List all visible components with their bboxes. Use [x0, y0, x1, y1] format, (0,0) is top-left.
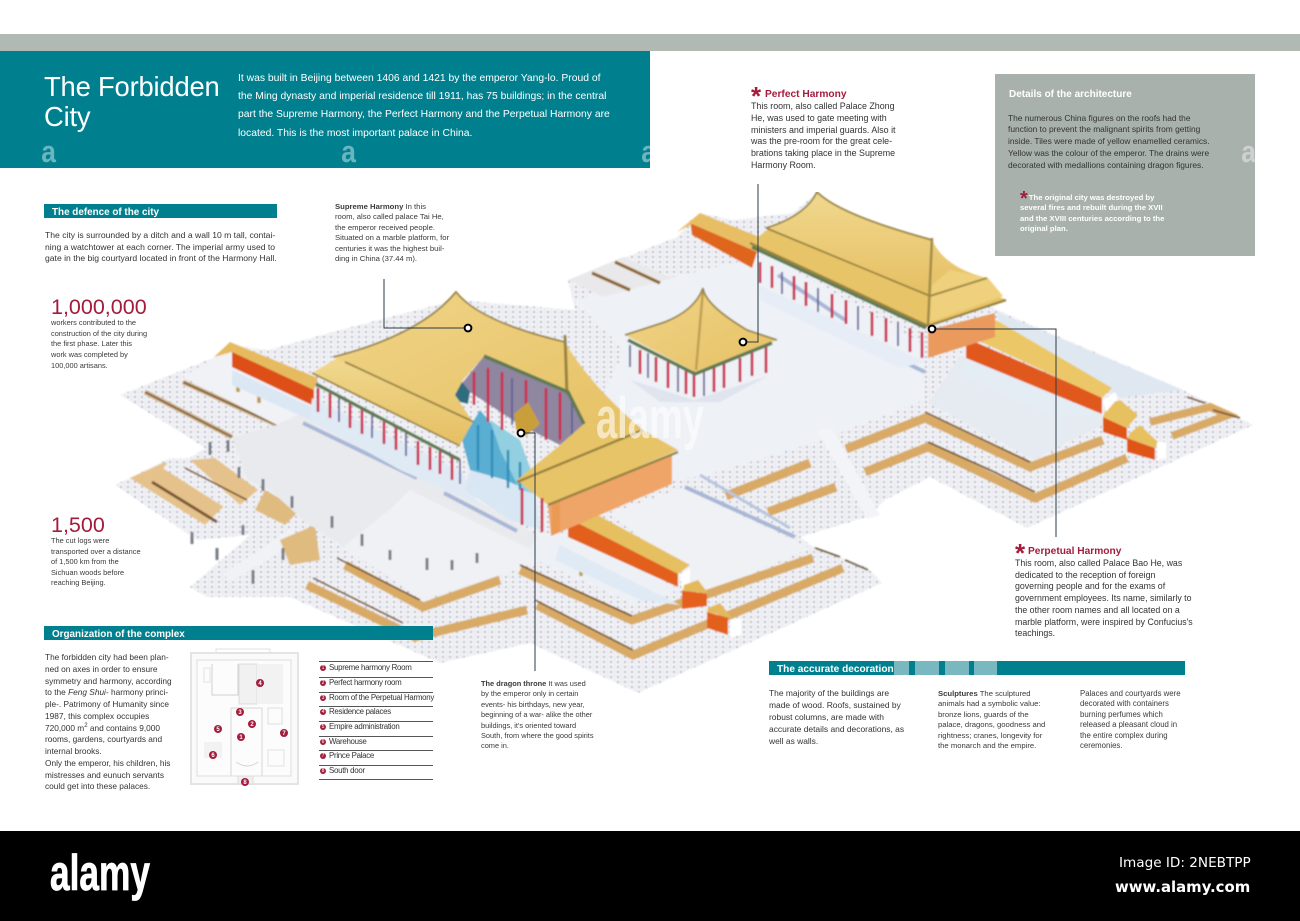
decoration text: wood: robust columns, are made with [769, 712, 884, 722]
organization text: ned on axes in order to ensure [45, 664, 158, 674]
stat: 1,000,000: 1,000,000 [51, 295, 147, 319]
map legend: 3 [322, 694, 324, 700]
terrace: right tan bands [726, 397, 1240, 519]
floor plan map: 4 [258, 681, 262, 687]
organization text: 1987, this complex occupies [45, 711, 149, 721]
footer url: www.alamy.com [1115, 878, 1250, 896]
organization text: mistresses and eunuch servants [45, 770, 164, 780]
plaza: central [232, 405, 545, 600]
callout: Perpetual Harmony: governing people and for the exams of [1015, 581, 1165, 591]
map legend: 4 [322, 709, 324, 715]
map legend [319, 661, 434, 780]
map legend: 2 [322, 680, 324, 686]
floor plan map: 2 [250, 722, 254, 728]
panel heading: Details of the architecture [1009, 89, 1132, 100]
callout: Perpetual Harmony: * [1015, 538, 1025, 568]
top grey band [0, 34, 1300, 51]
decoration text: sculptures: palace, dragons, goodness and [938, 720, 1045, 729]
wall: rear right orange [960, 320, 1166, 460]
callout line: Perfect Harmony [740, 184, 758, 345]
footer image id: Image ID: 2NEBTPP [1119, 855, 1251, 871]
section: defence heading [44, 204, 277, 218]
panel note: and the XVIII centuries according to the [1020, 214, 1164, 223]
callout: dragon throne: by the emperor only in certain [481, 689, 578, 698]
intro text: the Ming dynasty and imperial residence till 1911, has 75 buildings; in the central [238, 91, 606, 102]
organization text: to the Feng Shui- harmony princi- [45, 687, 168, 697]
building: Supreme Harmony hall [310, 292, 678, 536]
panel text [1008, 112, 1210, 170]
stat: 1,000,000 [51, 295, 147, 370]
decoration text: wood: made of wood. Roofs, sustained by [769, 700, 901, 710]
callout: Perpetual Harmony: the other room names and all located on a [1015, 605, 1180, 615]
organization text: 720,000 m2 and contains 9,000 [45, 722, 160, 732]
organization text: Only the emperor, his children, his [45, 758, 170, 768]
callout: Perfect Harmony: brations taking place in the Supreme [751, 148, 895, 158]
callout: Perpetual Harmony [1015, 538, 1193, 638]
map legend: Warehouse [329, 736, 367, 746]
decoration text: perfumes: ceremonies. [1080, 741, 1122, 750]
floor plan map: 7 [282, 731, 286, 737]
callout: Perpetual Harmony: marble platform, were inspired by Confucius's [1015, 617, 1193, 627]
stat: 1,500: reaching Beijing. [51, 578, 106, 587]
organization text [45, 652, 172, 791]
watermark letters: a [41, 134, 56, 168]
callout: dragon throne [481, 679, 594, 750]
organization text: The forbidden city had been plan- [45, 652, 169, 662]
map legend: 1 [322, 665, 324, 671]
callout: Perfect Harmony: This room, also called Palace Zhong [751, 101, 895, 111]
callout line: Supreme Harmony [384, 279, 471, 331]
organization text: ple-. Patrimony of Humanity since [45, 699, 169, 709]
organization text: could get into these palaces. [45, 781, 150, 791]
map legend: Perfect harmony room [329, 678, 401, 687]
callout: Supreme Harmony: Supreme Harmony In this [335, 202, 426, 211]
callout: dragon throne: The dragon throne It was used [481, 679, 586, 688]
organization text: internal brooks. [45, 746, 102, 756]
floor plan map [190, 648, 299, 786]
stat: 1,500: The cut logs were [51, 536, 109, 545]
panel note: several fires and rebuilt during the XVII [1020, 203, 1163, 212]
decoration text: sculptures: animals had a symbolic value: [938, 699, 1041, 708]
callout: Perpetual Harmony: dedicated to the reception of foreign [1015, 570, 1155, 580]
columns: left side [318, 388, 460, 484]
map legend: Supreme harmony Room [329, 663, 412, 672]
callout: Perpetual Harmony: teachings. [1015, 628, 1055, 638]
callout: Perfect Harmony: ministers and imperial guards. Also it [751, 125, 896, 135]
building: Perfect Harmony pavilion [625, 288, 777, 402]
plaza: upper left [183, 350, 318, 425]
callout: dragon throne: South, from where the good spirits [481, 731, 594, 740]
section: organization heading [44, 626, 433, 640]
callout: Perfect Harmony: Perfect Harmony [765, 89, 847, 100]
stat: 1,000,000: work was completed by [51, 350, 128, 359]
decoration text: sculptures: bronze lions, guards of the [938, 710, 1029, 719]
callout: Perfect Harmony: was the pre-room for the great cele- [751, 136, 892, 146]
panel text: Yellow was the colour of the emperor. The drains were [1008, 148, 1209, 158]
stat: 1,000,000: workers contributed to the [51, 318, 136, 327]
callout: Perfect Harmony: * [751, 81, 761, 111]
title: City [44, 101, 90, 132]
defence text: gate in the big courtyard located in front of the Harmony Hall. [45, 253, 277, 263]
decoration text: perfumes: released a pleasant cloud in [1080, 720, 1177, 729]
map legend: 6 [322, 738, 324, 744]
intro text: part the Supreme Harmony, the Perfect Harmony and the Perpetual Harmony are [238, 109, 610, 120]
decoration text: wood: accurate details and decorations, as [769, 724, 904, 734]
intro text: located. This is the most important palace in China. [238, 128, 472, 139]
callout: Supreme Harmony: centuries it was the highest buil- [335, 244, 444, 253]
floor plan map: 3 [238, 710, 242, 716]
map legend: Empire administration [329, 722, 399, 731]
map legend: Residence palaces [329, 707, 391, 716]
map legend: 7 [322, 753, 324, 759]
stat: 1,500: transported over a distance [51, 546, 141, 556]
decoration text: sculptures: the monarch and the empire. [938, 741, 1036, 750]
map legend: 8 [322, 768, 324, 774]
callout: Perfect Harmony [751, 81, 896, 170]
watermark letters: a [341, 134, 356, 168]
wall: rear left orange [677, 213, 767, 268]
intro text: It was built in Beijing between 1406 and 1421 by the emperor Yang-lo. Proud of [238, 73, 600, 84]
decoration text: perfumes: decorated with containers [1080, 699, 1169, 708]
stat: 1,000,000: the first phase. Later this [51, 339, 132, 348]
decoration text: perfumes: the entire complex during [1080, 731, 1168, 740]
callout: Perpetual Harmony: government employees. Its name, similarly to [1015, 593, 1192, 603]
callout: Supreme Harmony [335, 202, 449, 263]
terrace: left lower stairs [130, 458, 258, 525]
callout: dragon throne: beginning of a war- alike the other [481, 710, 592, 719]
panel note: *The original city was destroyed by [1020, 188, 1154, 210]
wall: lower front orange [555, 507, 741, 638]
columns: interior [474, 368, 572, 440]
wall: left orange [214, 342, 330, 420]
panel text: The numerous China figures on the roofs had the [1008, 112, 1190, 122]
map legend: Room of the Perpetual Harmony [329, 692, 434, 702]
callout: dragon throne: events- his birthdays, new year, [481, 700, 585, 709]
panel: details of the architecture [995, 74, 1255, 256]
callout line: dragon throne [518, 430, 535, 671]
platform silhouette with balustrades [115, 193, 1253, 693]
watermark: alamy: alamy [596, 386, 704, 451]
stat: 1,500: 1,500 [51, 513, 105, 537]
floor plan map: 6 [211, 753, 215, 759]
plaza: front of lower wall [525, 535, 680, 603]
map legend: Prince Palace [329, 751, 374, 760]
callout: dragon throne: buildings, it's oriented toward [481, 721, 576, 730]
decoration text: perfumes: burning perfumes which [1080, 710, 1163, 719]
organization text: rooms, gardens, courtyards and [45, 734, 162, 744]
decoration text: perfumes: Palaces and courtyards were [1080, 689, 1181, 698]
plaza: behind right wall [997, 312, 1183, 398]
callout: Supreme Harmony: Situated on a marble platform, for [335, 233, 449, 242]
plaza: rear and middle courtyard [573, 255, 925, 480]
floor plan map: 8 [243, 780, 247, 786]
plaza: lower right courtyard [610, 488, 810, 593]
defence text: ning a watchtower at each corner. The imperial army used to [45, 242, 275, 252]
building: Perpetual Harmony hall [750, 192, 1006, 368]
section: accurate decoration heading [769, 661, 1185, 675]
callout line: Perpetual Harmony [929, 326, 1056, 537]
title [44, 71, 220, 132]
terrace: ramp staircase [190, 490, 333, 597]
stat: 1,500: Sichuan woods before [51, 568, 124, 576]
stat: 1,500 [51, 513, 141, 587]
callout: Perfect Harmony: He, was used to gate meeting with [751, 113, 887, 123]
panel text: function to prevent the malignant spirits from getting [1008, 124, 1200, 134]
blue streaks [478, 425, 520, 490]
stat: 1,500: of 1,500 km from the [51, 557, 119, 566]
defence text [45, 230, 277, 263]
title: The Forbidden [44, 71, 220, 102]
panel text: inside. Tiles were made of yellow enamelled ceramics. [1008, 136, 1210, 146]
callout: Supreme Harmony: room, also called palace Tai He, [335, 212, 444, 221]
floor plan map: 1 [239, 735, 243, 741]
stat: 1,000,000: 100,000 artisans. [51, 361, 108, 370]
terrace: left upper stairs [145, 382, 277, 437]
stat: 1,000,000: construction of the city during [51, 329, 147, 338]
decoration text: wood [769, 688, 904, 746]
section: defence heading: The defence of the city [52, 206, 159, 218]
defence text: The city is surrounded by a ditch and a wall 10 m tall, contai- [45, 230, 275, 240]
posts and small shadows [192, 275, 925, 586]
callout: Supreme Harmony: ding in China (37.44 m). [335, 254, 417, 263]
map legend: 5 [322, 724, 324, 730]
callout: Perfect Harmony: Harmony Room. [751, 160, 816, 170]
callout: Perpetual Harmony: Perpetual Harmony [1028, 546, 1121, 557]
intro text [238, 73, 610, 139]
footer bar [0, 831, 1300, 921]
decoration text: sculptures [938, 689, 1045, 750]
panel note [1020, 188, 1164, 233]
callout: dragon throne: come in. [481, 741, 509, 750]
watermark: right letter: a [1241, 134, 1256, 169]
plaza: right courtyard [928, 355, 1103, 460]
section: organization heading: Organization of the complex [52, 628, 185, 640]
watermark letters [41, 134, 650, 168]
floor plan map: 5 [216, 727, 220, 733]
decoration text: perfumes [1080, 689, 1181, 750]
decoration text: sculptures: rightness; cranes, longevity for [938, 731, 1042, 740]
decoration text: sculptures: Sculptures The sculptured [938, 689, 1031, 698]
decoration text: wood: The majority of the buildings are [769, 688, 889, 698]
decoration text: wood: well as walls. [769, 736, 818, 746]
rear left stairs [568, 257, 673, 297]
header panel [0, 51, 650, 168]
panel text: decorated with medallions containing dragon figures. [1008, 160, 1204, 170]
section: accurate decoration heading: The accurate decoration [777, 664, 894, 674]
panel note: original plan. [1020, 224, 1068, 233]
callout: Perpetual Harmony: This room, also called Palace Bao He, was [1015, 558, 1182, 568]
terrace: lower central tan bands [307, 548, 868, 655]
organization text: symmetry and harmony, according [45, 676, 172, 686]
map legend: South door [329, 766, 365, 774]
plaza: lower central [343, 490, 548, 600]
callout: Supreme Harmony: the emperor received people. [335, 223, 435, 232]
